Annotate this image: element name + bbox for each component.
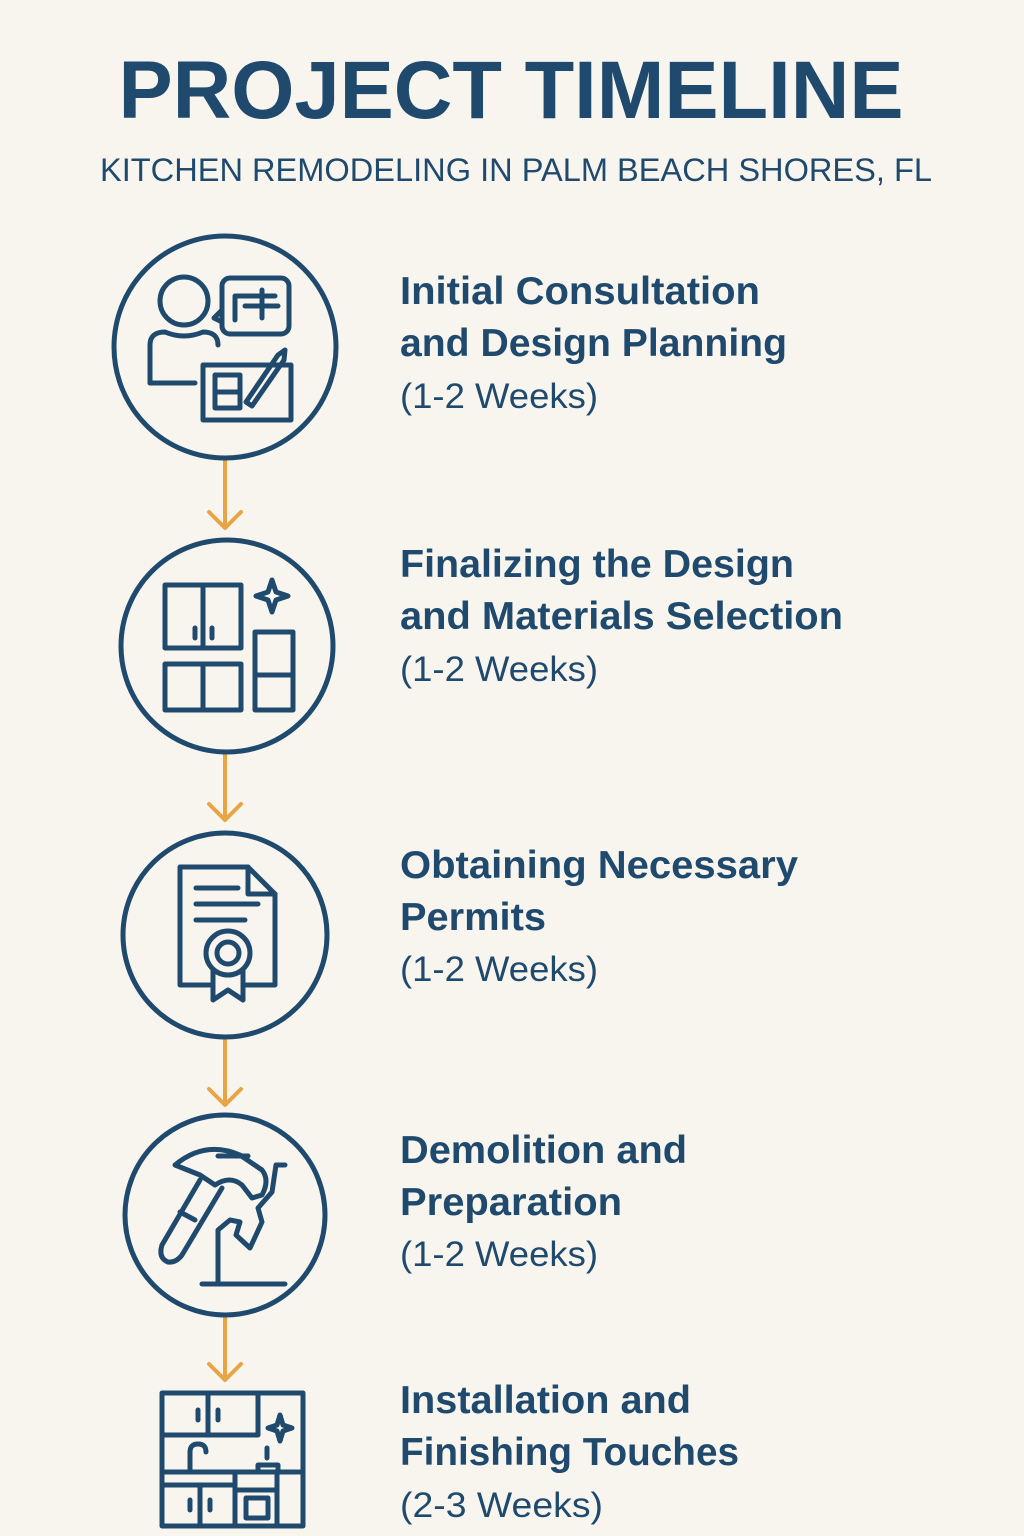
icon: design materials [121,540,333,752]
step 4 text: (1-2 Weeks) [400,1235,598,1274]
step 5 text: (2-3 Weeks) [400,1486,603,1525]
arrows [209,459,241,1380]
step 5 text [400,1379,739,1525]
step 3 text [400,844,798,989]
step 2 text: and Materials Selection [400,595,843,638]
icon: permit document [123,833,327,1037]
step 1 text: Initial Consultation [400,270,760,313]
arrow 4 [209,1316,241,1380]
step 2 text: (1-2 Weeks) [400,650,598,689]
step 3 text: Permits [400,896,546,939]
step 1 text [400,270,787,416]
step 1 text: (1-2 Weeks) [400,377,598,416]
subtitle: KITCHEN REMODELING IN PALM BEACH SHORES, FL [100,152,932,188]
title: PROJECT TIMELINE [118,45,904,136]
step 4 text: Demolition and [400,1129,687,1172]
step 4 text: Preparation [400,1181,622,1224]
step 3 text: Obtaining Necessary [400,844,798,887]
step 3 text: (1-2 Weeks) [400,950,598,989]
step 5 text: Installation and [400,1379,691,1422]
step 2 text [400,543,843,689]
arrow 3 [209,1038,241,1105]
step 4 text [400,1129,687,1274]
icon: demolition [125,1115,325,1315]
step 2 text: Finalizing the Design [400,543,794,586]
arrow 2 [209,753,241,820]
arrow 1 [209,459,241,528]
step 5 text: Finishing Touches [400,1431,739,1474]
icon: consultation [114,236,336,458]
icon: kitchen [162,1393,303,1526]
step 1 text: and Design Planning [400,322,787,365]
